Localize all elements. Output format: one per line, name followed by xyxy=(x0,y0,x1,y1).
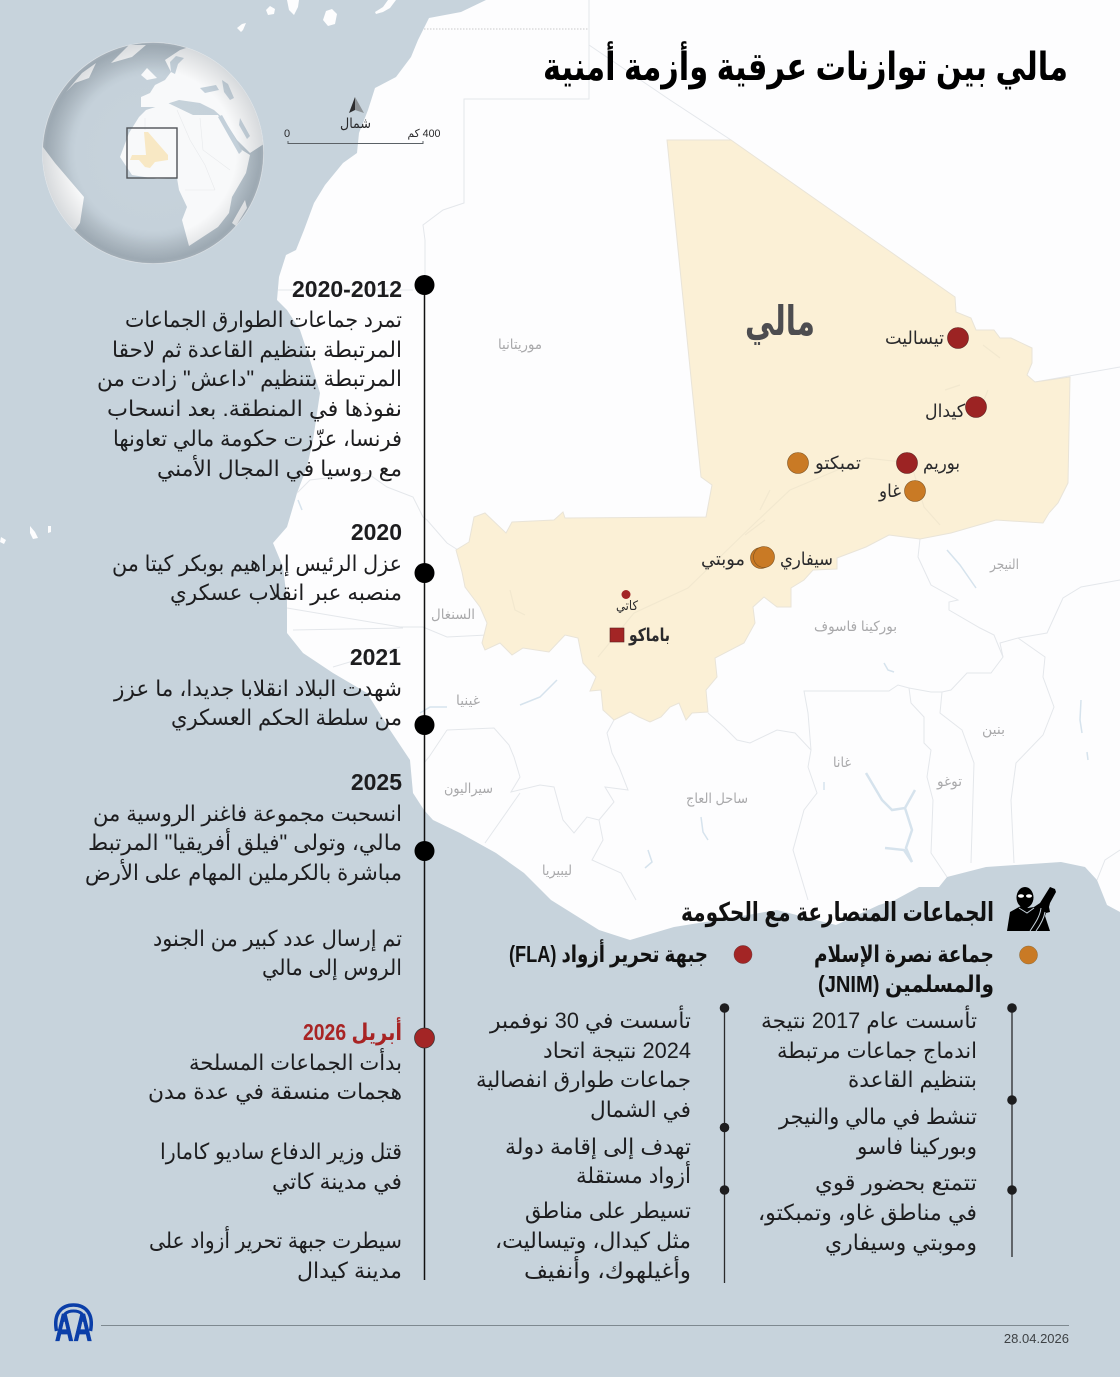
footer logo: Anadolu Agency: AA xyxy=(55,1307,92,1350)
column: JNIM: جماعة نصرة الإسلام xyxy=(814,941,994,968)
column: JNIM: بتنظيم القاعدة xyxy=(848,1067,977,1093)
map city: Sevare xyxy=(754,546,833,570)
event: April 2026: بدأت الجماعات المسلحة xyxy=(189,1048,402,1075)
event: 2020: 2020 xyxy=(351,519,402,545)
map city: Bourem: بوريم xyxy=(923,453,960,474)
map city: Tessalit: تيساليت xyxy=(885,328,944,348)
event: 2021: شهدت البلاد انقلابا جديدا، ما عزز xyxy=(113,676,402,701)
footer logo: Anadolu Agency xyxy=(55,1305,92,1350)
north arrow: شمال xyxy=(340,115,371,131)
map labels: neighbouring countries: النيجر xyxy=(989,556,1019,573)
column: JNIM: في مناطق غاو، وتمبكتو، xyxy=(758,1200,977,1226)
map labels: neighbouring countries: ساحل العاج xyxy=(686,790,748,807)
event: defence minister killed: في مدينة كاتي xyxy=(272,1169,402,1195)
column: JNIM: والمسلمين (JNIM) xyxy=(818,971,994,998)
event: April 2026: هجمات منسقة في عدة مدن xyxy=(148,1079,402,1105)
event: April 2026: أبريل 2026 xyxy=(303,1016,402,1046)
map city: Mopti xyxy=(701,548,772,570)
event: Russian troops xyxy=(153,926,402,981)
scale bar: 0 xyxy=(284,128,290,140)
map city: Bamako capital: باماكو xyxy=(628,625,670,646)
scale bar xyxy=(284,128,440,144)
column: JNIM: اندماج جماعات مرتبطة xyxy=(777,1038,977,1064)
map labels: neighbouring countries: بوركينا فاسوف xyxy=(814,618,897,635)
column: FLA: أزواد مستقلة xyxy=(576,1161,691,1188)
event: Russian troops: الروس إلى مالي xyxy=(262,955,402,981)
footer rule xyxy=(101,1324,1069,1326)
footer date: 28.04.2026 xyxy=(1004,1331,1069,1346)
column: FLA: جماعات طوارق انفصالية xyxy=(476,1067,691,1092)
map labels: neighbouring countries: موريتانيا xyxy=(498,336,542,353)
event: 2012-2020: مع روسيا في المجال الأمني xyxy=(157,455,402,482)
timeline axis xyxy=(424,285,426,1280)
groups heading: الجماعات المتصارعة مع الحكومة xyxy=(681,897,994,928)
event: 2020: منصبه عبر انقلاب عسكري xyxy=(170,580,402,605)
north arrow xyxy=(340,97,371,131)
event: Russian troops: تم إرسال عدد كبير من الجنود xyxy=(153,926,402,952)
map city: Bourem xyxy=(896,452,960,474)
column: JNIM: تتمتع بحضور قوي xyxy=(815,1170,977,1195)
locator globe xyxy=(40,42,270,264)
column: JNIM: وبوركينا فاسو xyxy=(856,1134,977,1159)
map city: Mopti: موبتي xyxy=(701,549,745,570)
map city: Sevare: سيفاري xyxy=(780,549,833,570)
column: FLA: تأسست في 30 نوفمبر xyxy=(489,1005,691,1034)
event: 2012-2020: نفوذها في المنطقة. بعد انسحاب xyxy=(107,396,402,422)
event: 2021: 2021 xyxy=(350,644,401,670)
map labels: neighbouring countries: غينيا xyxy=(456,692,480,708)
event: 2020: عزل الرئيس إبراهيم بوبكر كيتا من xyxy=(112,551,402,577)
event: 2012-2020: 2020-2012 xyxy=(292,276,402,302)
timeline xyxy=(85,275,434,1283)
event: defence minister killed: قتل وزير الدفاع ساديو كامارا xyxy=(160,1139,402,1164)
event: 2025 xyxy=(85,769,402,886)
column: FLA: جبهة تحرير أزواد (FLA) xyxy=(509,938,708,968)
map city: Kidal xyxy=(925,396,986,421)
event: 2025: مباشرة بالكرملين المهام على الأرض xyxy=(85,859,402,886)
map: West Africa land and borders xyxy=(0,0,1120,940)
event: 2012-2020: المرتبطة بتنظيم "داعش" زادت من xyxy=(97,366,402,392)
map labels: neighbouring countries: غانا xyxy=(833,754,851,770)
event: 2012-2020: تمرد جماعات الطوارق الجماعات xyxy=(125,307,402,332)
column: FLA: تسيطر على مناطق xyxy=(525,1198,691,1224)
event: 2025: انسحبت مجموعة فاغنر الروسية من xyxy=(93,801,402,826)
map city: Timbuktu: تمبكتو xyxy=(814,453,861,474)
event: 2021 xyxy=(113,644,402,731)
map city: Gao xyxy=(878,480,926,502)
column: FLA xyxy=(476,938,752,1283)
map labels: neighbouring countries: بنين xyxy=(982,721,1005,738)
column: JNIM: وموبتي وسيفاري xyxy=(825,1230,977,1256)
map city: Timbuktu xyxy=(788,452,861,474)
column: FLA: مثل كيدال، وتيساليت، xyxy=(495,1228,691,1253)
column: JNIM: تنشط في مالي والنيجر xyxy=(778,1104,977,1130)
event: 2025: مالي، وتولى "فيلق أفريقيا" المرتبط xyxy=(88,828,402,856)
event: 2012-2020: المرتبطة بتنظيم القاعدة ثم لاحقا xyxy=(112,337,402,363)
event: Kidal captured: مدينة كيدال xyxy=(297,1258,402,1283)
column: FLA: 2024 نتيجة اتحاد xyxy=(543,1038,691,1063)
event: 2012-2020 xyxy=(97,276,402,482)
event: Kidal captured: سيطرت جبهة تحرير أزواد على xyxy=(149,1226,402,1253)
event: 2012-2020: فرنسا، عزّزت حكومة مالي تعاونها xyxy=(113,426,402,452)
map labels: neighbouring countries: توغو xyxy=(936,773,962,790)
event: Kidal captured xyxy=(149,1226,402,1283)
timeline markers xyxy=(414,275,434,1048)
column: FLA: وأغيلهوك، وأنفيف xyxy=(524,1256,691,1283)
globe locator box xyxy=(127,128,177,178)
column: FLA: في الشمال xyxy=(590,1097,691,1123)
map labels: neighbouring countries: ليبيريا xyxy=(542,862,572,879)
map city: Kidal: كيدال xyxy=(925,401,965,421)
map city: Gao: غاو xyxy=(878,481,901,502)
map: Mali country xyxy=(456,140,1070,722)
column: FLA: تهدف إلى إقامة دولة xyxy=(505,1134,691,1160)
event: defence minister killed xyxy=(160,1139,402,1195)
column: JNIM: تأسست عام 2017 نتيجة xyxy=(761,1005,977,1033)
map city: Tessalit xyxy=(885,328,968,348)
map label: Mali: مالي xyxy=(745,298,815,345)
column: JNIM xyxy=(758,941,1038,1257)
map city: Kati: كاتي xyxy=(616,598,639,613)
map labels: neighbouring countries: سيراليون xyxy=(444,780,493,797)
map city: Bamako capital xyxy=(610,625,670,646)
event: 2025: 2025 xyxy=(351,769,402,795)
scale bar: 400 كم xyxy=(408,128,440,140)
event: 2021: من سلطة الحكم العسكري xyxy=(171,705,402,731)
icon: masked fighter xyxy=(1007,887,1056,931)
event: 2020 xyxy=(112,519,402,605)
map labels: neighbouring countries xyxy=(431,336,1019,879)
event: April 2026 xyxy=(148,1016,402,1105)
armed groups panel xyxy=(476,887,1056,1283)
map labels: neighbouring countries: السنغال xyxy=(431,606,475,622)
map city: Kati xyxy=(616,590,639,613)
